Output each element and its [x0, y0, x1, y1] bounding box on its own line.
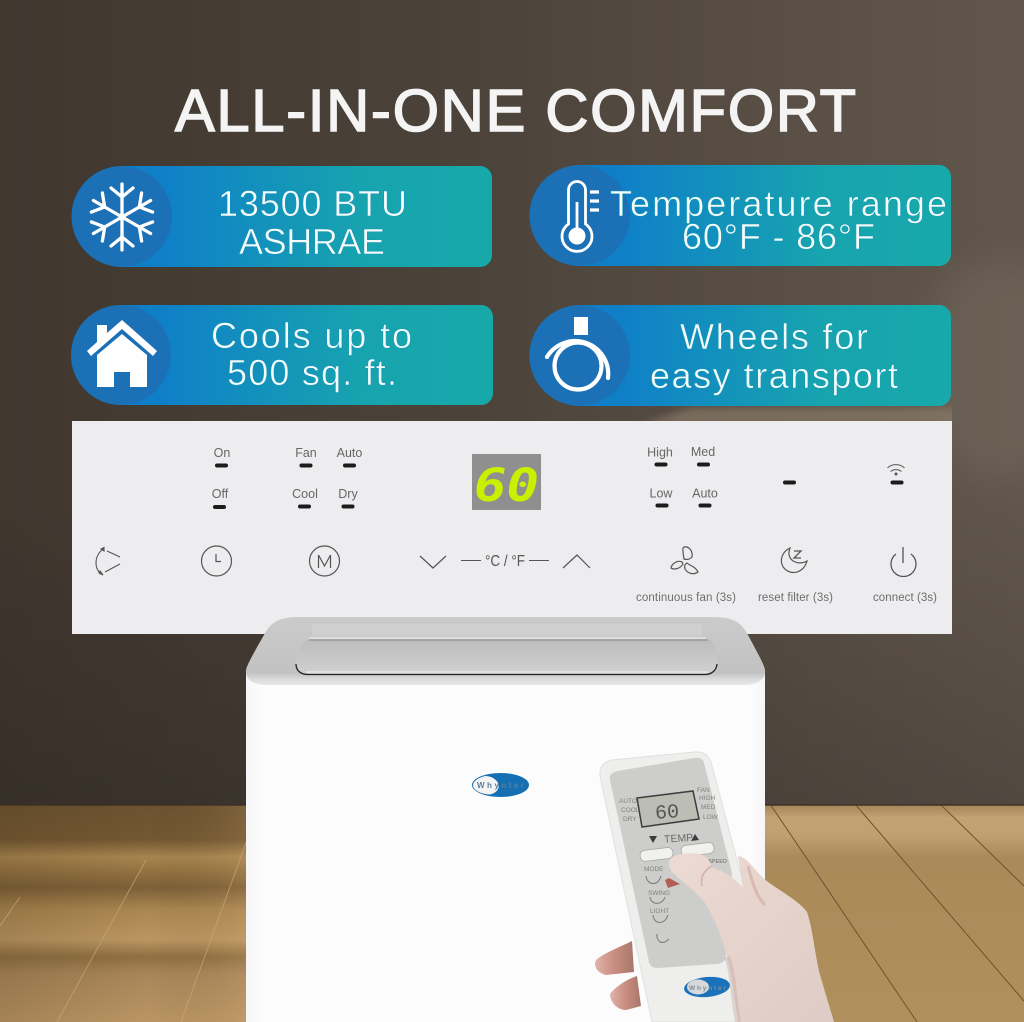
whynter logo: Whynter	[477, 781, 524, 790]
remote labels	[619, 787, 727, 915]
button captions	[636, 592, 937, 604]
hand	[595, 853, 834, 1022]
button captions: reset filter (3s)	[758, 592, 833, 604]
fingers	[595, 941, 634, 975]
remote labels: FAN	[697, 787, 710, 794]
indicator labels: Off	[212, 487, 229, 501]
text: temperature range: Temperature range	[610, 183, 947, 224]
indicator labels: High	[647, 446, 673, 460]
panel: cools up to 500 sq ft	[71, 305, 493, 405]
icon: snowflake	[88, 184, 156, 250]
icon: wifi	[888, 465, 904, 475]
text: cools up to 500 sq ft: 500 sq. ft.	[227, 352, 397, 393]
remote labels: TEMP	[664, 832, 694, 846]
remote labels: AUTO	[619, 798, 637, 805]
icon: timer	[202, 546, 232, 576]
remote labels: HIGH	[699, 795, 716, 802]
remote labels: DRY	[623, 816, 637, 823]
remote labels: SWING	[648, 890, 670, 897]
icon: temperature down arrow	[420, 556, 446, 568]
icon: power	[891, 547, 916, 576]
panel: wheels for easy transport	[530, 305, 951, 406]
icon: fan	[671, 547, 698, 574]
remote display	[637, 791, 699, 827]
icon: thermometer	[562, 182, 599, 251]
title: ALL-IN-ONE COMFORT	[175, 77, 856, 144]
text: 13500 BTU ASHRAE: ASHRAE	[239, 221, 385, 262]
remote control in hand	[595, 752, 834, 1022]
text: wheels for easy transport: easy transport	[650, 355, 898, 396]
remote buttons	[640, 834, 715, 942]
indicator labels: Cool	[292, 487, 318, 501]
remote logo: Whynter	[689, 985, 726, 992]
top vent	[296, 624, 717, 674]
indicator labels: On	[214, 446, 230, 460]
air conditioner unit	[246, 617, 765, 1022]
remote labels: MED	[701, 804, 716, 811]
remote labels: LIGHT	[650, 908, 669, 915]
indicator labels	[212, 445, 718, 501]
button captions: continuous fan (3s)	[636, 592, 736, 604]
icon: wheel	[547, 317, 608, 390]
remote labels: MODE	[644, 866, 664, 873]
panel: temperature range	[530, 165, 951, 266]
remote labels: FAN SPEED	[696, 859, 727, 865]
indicator lights	[213, 462, 904, 509]
unit body	[246, 670, 765, 1022]
temperature unit label	[461, 553, 549, 570]
icon: sleep moon	[781, 548, 807, 572]
icon: mode	[310, 546, 340, 576]
temperature display: 60	[474, 459, 539, 512]
panel: control panel	[72, 421, 952, 634]
remote body	[600, 752, 762, 1022]
remote logo	[683, 975, 731, 999]
text: temperature range: 60°F - 86°F	[682, 216, 875, 257]
indicator labels: Auto	[692, 486, 718, 500]
icon: temperature up arrow	[563, 555, 590, 568]
indicator labels: Low	[650, 486, 673, 500]
text: cools up to 500 sq ft: Cools up to	[211, 315, 412, 356]
indicator labels: Dry	[338, 487, 358, 501]
remote control plate	[610, 758, 732, 968]
palm and thumb	[669, 853, 834, 1022]
whynter logo	[472, 773, 529, 797]
indicator labels: Auto	[337, 446, 362, 460]
button captions: connect (3s)	[873, 592, 937, 604]
remote labels: LOW	[703, 814, 719, 821]
icon: swing	[96, 548, 120, 575]
indicator labels: Fan	[295, 446, 317, 460]
unit top lid	[246, 617, 765, 685]
text: wheels for easy transport: Wheels for	[680, 316, 868, 357]
text: 13500 BTU ASHRAE: 13500 BTU	[218, 183, 407, 224]
remote display: 60	[654, 801, 680, 826]
temperature unit label: °C / °F	[485, 553, 525, 570]
icon: house	[87, 320, 157, 387]
remote labels: COOL	[621, 807, 640, 814]
panel: 13500 BTU ASHRAE	[72, 166, 492, 267]
indicator labels: Med	[691, 445, 715, 459]
